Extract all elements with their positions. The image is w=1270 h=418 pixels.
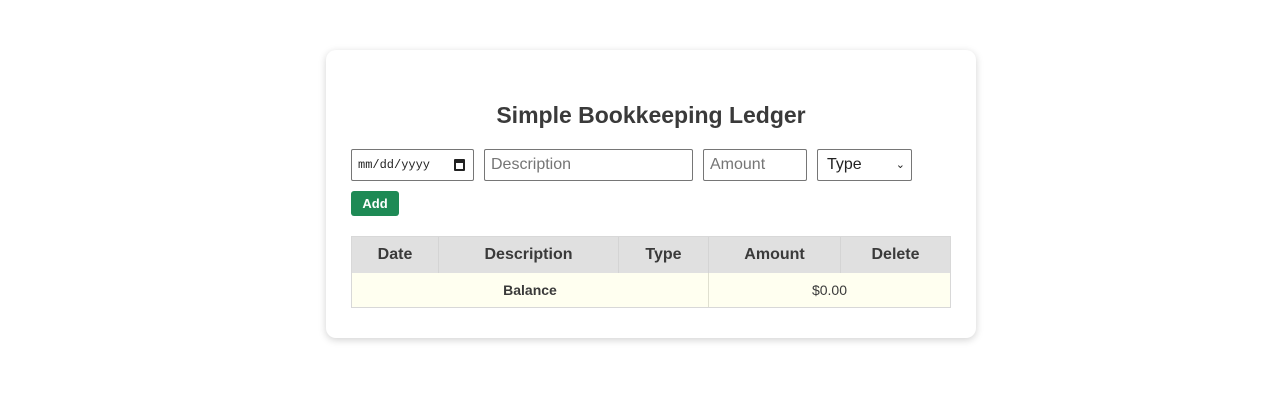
balance row: $0.00 xyxy=(812,282,847,298)
input: amount xyxy=(703,149,807,181)
button: add xyxy=(351,191,399,216)
button: add: Add xyxy=(362,196,388,211)
table header xyxy=(352,237,950,273)
table header: Amount xyxy=(744,246,805,263)
balance row xyxy=(352,273,950,307)
select: type: ⌄ xyxy=(896,159,905,171)
input: date: mm/dd/yyyy xyxy=(358,158,430,172)
table header: Delete xyxy=(871,246,920,263)
select: type: Type xyxy=(827,156,862,173)
select: type xyxy=(817,149,912,181)
table: ledger xyxy=(351,236,951,308)
table header: Date xyxy=(378,246,412,263)
input: amount: Amount xyxy=(710,156,765,173)
balance row: Balance xyxy=(503,282,557,298)
input: date xyxy=(351,149,474,181)
title: Simple Bookkeeping Ledger xyxy=(496,102,806,128)
panel: ledger card xyxy=(326,50,976,338)
input: description xyxy=(484,149,693,181)
table header: Description xyxy=(484,246,572,263)
table header: Type xyxy=(645,246,682,263)
input: description: Description xyxy=(491,156,571,173)
